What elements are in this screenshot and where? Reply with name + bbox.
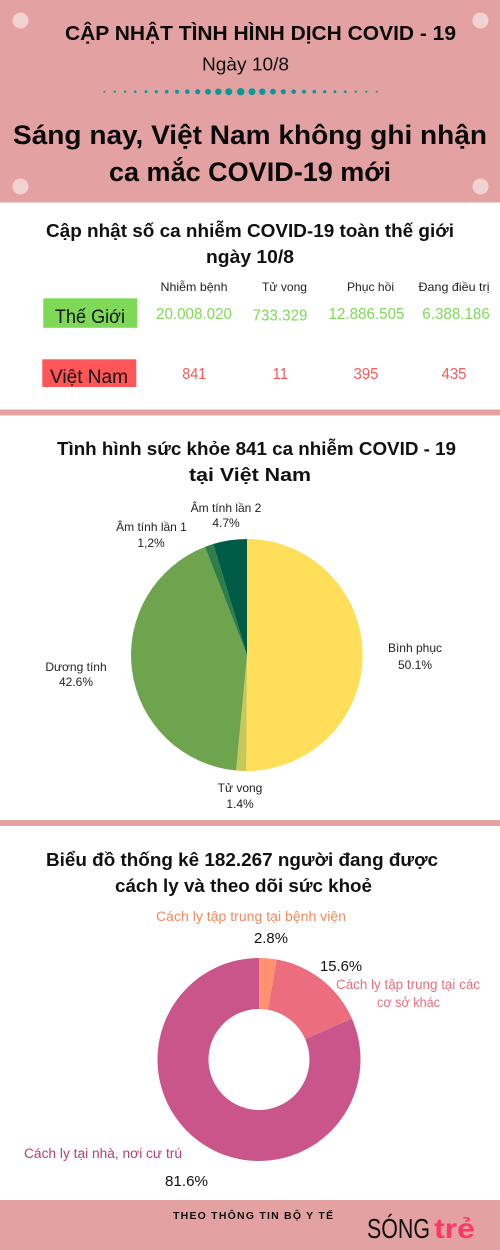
heading: Cập nhật số ca nhiễm COVID-19 toàn thế giới xyxy=(46,220,454,241)
row: Thế Giới values: 20.008.020 xyxy=(156,306,232,323)
title: CẬP NHẬT TÌNH HÌNH DỊCH COVID - 19 xyxy=(65,21,456,45)
panel: world update table xyxy=(42,220,490,388)
source note: THEO THÔNG TIN BỘ Y TẾ xyxy=(173,1209,333,1222)
panel: quarantine donut xyxy=(24,849,480,1190)
pie labels: Bình phục xyxy=(388,641,442,655)
column headers: Đang điều trị xyxy=(418,280,490,294)
row: Thế Giới values: 12.886.505 xyxy=(328,306,404,323)
row: Việt Nam label: Việt Nam xyxy=(50,367,128,388)
donut labels: Cách ly tập trung tại các xyxy=(336,977,480,992)
heading: Biểu đồ thống kê 182.267 người đang được xyxy=(46,849,438,870)
pie labels: 1,2% xyxy=(137,536,165,550)
headline xyxy=(13,120,487,187)
row: Thế Giới values: 6.388.186 xyxy=(422,306,490,323)
logo: trẻ xyxy=(434,1213,475,1244)
panel: footer xyxy=(0,1200,500,1250)
heading: ngày 10/8 xyxy=(206,246,294,267)
heading: Tình hình sức khỏe 841 ca nhiễm COVID - 19 xyxy=(57,438,456,459)
donut labels: 81.6% xyxy=(165,1173,208,1190)
dotted divider xyxy=(103,88,378,95)
row: Thế Giới label: Thế Giới xyxy=(55,307,125,328)
headline: ca mắc COVID-19 mới xyxy=(109,157,391,187)
row: Việt Nam values: 11 xyxy=(272,366,288,383)
row: Thế Giới values xyxy=(156,306,490,324)
donut labels: 15.6% xyxy=(320,958,362,975)
heading xyxy=(46,849,438,896)
headline: Sáng nay, Việt Nam không ghi nhận xyxy=(13,120,487,150)
pie chart xyxy=(131,539,363,771)
column headers: Nhiễm bệnh xyxy=(160,279,228,294)
pie labels: 4.7% xyxy=(212,516,240,530)
column headers: Tử vong xyxy=(262,280,307,294)
donut labels: cơ sở khác xyxy=(377,995,440,1010)
pie labels: 1.4% xyxy=(226,797,254,811)
row: Việt Nam values xyxy=(182,366,467,383)
heading: cách ly và theo dõi sức khoẻ xyxy=(115,875,372,896)
donut labels: Cách ly tập trung tại bệnh viện xyxy=(156,909,346,924)
pie labels: Âm tính lần 2 xyxy=(191,500,262,515)
pie labels: Tử vong xyxy=(218,781,262,795)
date: Ngày 10/8 xyxy=(202,54,289,74)
donut chart xyxy=(158,958,361,1161)
panel: health status pie xyxy=(45,438,456,811)
pie labels: 42.6% xyxy=(59,675,93,689)
heading: tại Việt Nam xyxy=(189,464,311,485)
pie labels: Dương tính xyxy=(45,660,107,674)
row: Thế Giới label xyxy=(43,298,137,328)
donut labels: Cách ly tại nhà, nơi cư trú xyxy=(24,1146,182,1161)
row: Thế Giới values: 733.329 xyxy=(252,308,308,324)
donut labels: 2.8% xyxy=(254,930,288,947)
donut labels xyxy=(24,909,480,1190)
pie labels xyxy=(45,500,442,811)
pie labels: Âm tính lần 1 xyxy=(116,519,187,534)
heading xyxy=(46,220,454,267)
row: Việt Nam values: 395 xyxy=(354,366,378,383)
row: Việt Nam values: 435 xyxy=(442,366,466,383)
logo: SÓNG xyxy=(367,1213,430,1244)
pie labels: 50.1% xyxy=(398,658,432,672)
panel: header xyxy=(0,0,500,202)
column headers xyxy=(160,279,490,294)
heading xyxy=(57,438,456,485)
column headers: Phục hồi xyxy=(347,280,394,294)
row: Việt Nam label xyxy=(42,359,136,388)
row: Việt Nam values: 841 xyxy=(182,366,206,383)
